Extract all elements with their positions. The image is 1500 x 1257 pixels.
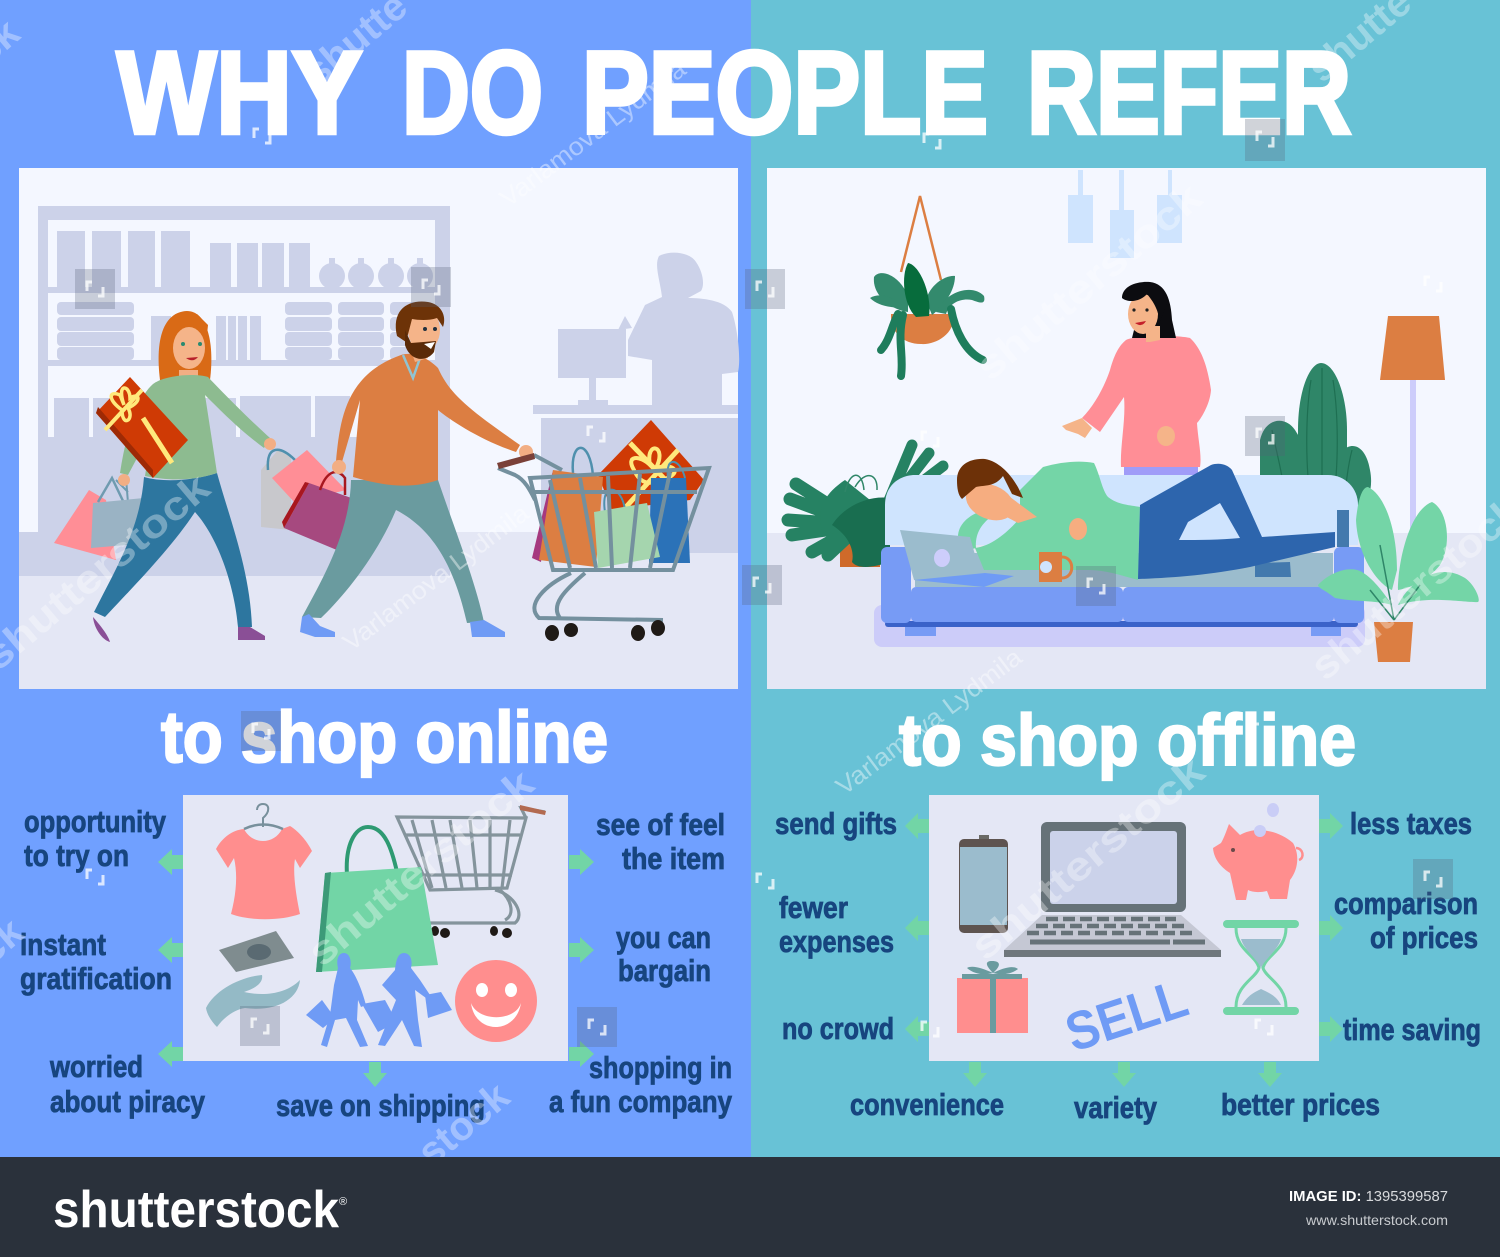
- panel: offline icons: [929, 795, 1319, 1064]
- heading: to shop online: to shop online: [161, 698, 608, 778]
- watermarks: Varlamova Lydmila: [495, 55, 691, 213]
- laptop: [900, 530, 984, 587]
- labels: online reasons: you can: [616, 920, 711, 955]
- watermarks: shutterstock: [968, 175, 1211, 389]
- labels: online reasons: a fun company: [549, 1084, 733, 1119]
- SELL stamp text: SELL: [1058, 968, 1195, 1064]
- title: REFER: [1027, 27, 1351, 158]
- labels: offline reasons: expenses: [779, 924, 894, 959]
- labels: offline reasons: no crowd: [782, 1011, 894, 1046]
- panel: offline shopping scene: [767, 168, 1486, 689]
- heading: to shop offline: to shop offline: [899, 701, 1356, 781]
- lying man with laptop: [900, 459, 1349, 587]
- standing woman: [1062, 282, 1211, 475]
- icon: green shopping bag: [316, 827, 438, 972]
- labels: online reasons: [20, 804, 733, 1123]
- title: DO: [402, 27, 543, 158]
- arrows: offline: [905, 813, 1343, 1087]
- labels: offline reasons: fewer: [779, 890, 848, 925]
- labels: online reasons: see of feel: [596, 807, 725, 842]
- icon: t-shirt on hanger: [216, 804, 312, 919]
- labels: offline reasons: convenience: [850, 1087, 1004, 1122]
- title: PEOPLE: [582, 27, 988, 158]
- arrows: online: [158, 849, 594, 1087]
- icon: shopping cart: [397, 808, 545, 923]
- right background: [751, 0, 1500, 1157]
- large cactus plant: [1260, 363, 1371, 510]
- icon: smiley face: [455, 960, 537, 1042]
- labels: offline reasons: send gifts: [775, 806, 897, 841]
- panel: online icons: [183, 795, 568, 1061]
- icon: piggy bank: [1213, 803, 1303, 900]
- woman bags: [54, 490, 116, 560]
- title: [117, 27, 1351, 158]
- labels: online reasons: shopping in: [589, 1050, 732, 1085]
- labels: offline reasons: better prices: [1221, 1087, 1380, 1122]
- potted plant: [1318, 487, 1479, 662]
- labels: online reasons: about piracy: [50, 1084, 206, 1119]
- hanging plant: [870, 196, 984, 376]
- footer logo: shutterstock: [53, 1181, 339, 1239]
- woman with bags: [54, 311, 276, 642]
- labels: offline reasons: [775, 806, 1481, 1125]
- mug: [1039, 552, 1062, 582]
- labels: online reasons: worried: [49, 1049, 143, 1084]
- ceiling lights: [1068, 170, 1182, 258]
- icon: open hand: [206, 975, 300, 1027]
- labels: online reasons: the item: [622, 841, 725, 876]
- gift box: [96, 377, 188, 478]
- title: WHY: [117, 27, 362, 158]
- labels: online reasons: gratification: [20, 961, 172, 996]
- man pushing cart: [261, 302, 533, 637]
- left background: [0, 0, 751, 1157]
- watermarks: Varlamova Lydmila: [338, 499, 534, 657]
- labels: offline reasons: variety: [1074, 1090, 1158, 1125]
- registered mark: ®: [339, 1196, 347, 1208]
- image id: IMAGE ID: 1395399587: [1289, 1188, 1448, 1205]
- panel: online shopping scene: [19, 168, 739, 689]
- labels: offline reasons: of prices: [1370, 920, 1478, 955]
- labels: online reasons: save on shipping: [276, 1088, 485, 1123]
- store shelves: [38, 206, 450, 576]
- watermarks: stock: [410, 1074, 518, 1175]
- labels: online reasons: opportunity: [24, 804, 167, 839]
- labels: offline reasons: less taxes: [1350, 806, 1472, 841]
- monstera plant: [788, 445, 943, 567]
- sofa: [881, 475, 1364, 636]
- watermarks: shutterstock: [963, 748, 1214, 969]
- icon: smartphone: [959, 835, 1008, 933]
- labels: online reasons: to try on: [24, 838, 129, 873]
- icon: gift box: [957, 961, 1028, 1033]
- icon: shopper silhouettes: [306, 953, 452, 1047]
- cashier silhouette and counter: [533, 253, 739, 553]
- watermarks: shutterstock: [300, 761, 543, 975]
- icon: hourglass: [1223, 920, 1299, 1015]
- floor lamp: [1380, 316, 1445, 560]
- labels: online reasons: bargain: [618, 953, 711, 988]
- labels: online reasons: instant: [20, 927, 106, 962]
- icon: laptop: [1004, 822, 1221, 957]
- website: www.shutterstock.com: [1305, 1212, 1448, 1228]
- icon: money banknote: [219, 931, 294, 972]
- footer bar: [0, 1157, 1500, 1257]
- rug: [874, 605, 1365, 647]
- watermarks: Varlamova Lydmila: [831, 643, 1027, 801]
- shopping cart full: [497, 420, 709, 641]
